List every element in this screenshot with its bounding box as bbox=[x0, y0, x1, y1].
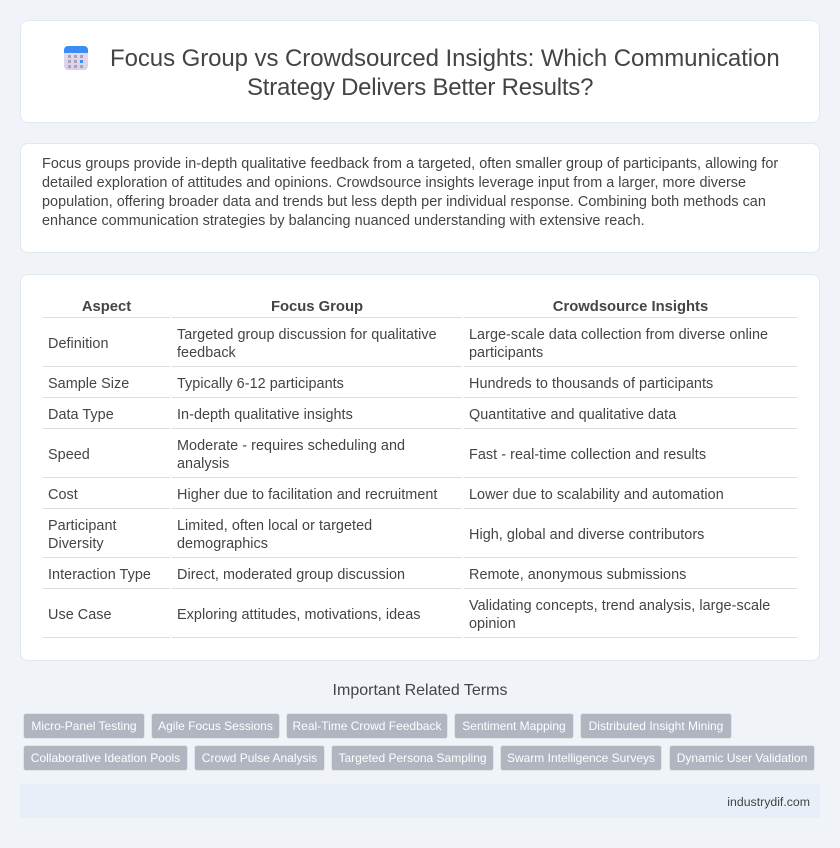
comparison table: Definition bbox=[48, 336, 108, 352]
comparison table: Participant bbox=[48, 518, 117, 534]
intro paragraph: population, offering broader data and trends but less depth per individual response. Combining both methods can bbox=[42, 194, 766, 210]
comparison table: Lower due to scalability and automation bbox=[469, 487, 724, 503]
intro paragraph bbox=[42, 156, 778, 229]
comparison table: Sample Size bbox=[48, 376, 129, 392]
related term tags: Real-Time Crowd Feedback bbox=[293, 719, 441, 733]
header panel bbox=[20, 20, 820, 123]
related term tags: Dynamic User Validation bbox=[677, 751, 807, 765]
related term tags: Collaborative Ideation Pools bbox=[31, 751, 180, 765]
icon: calendar bbox=[64, 46, 88, 70]
comparison table: Moderate - requires scheduling and bbox=[177, 438, 405, 454]
comparison table: Exploring attitudes, motivations, ideas bbox=[177, 607, 421, 623]
comparison table: High, global and diverse contributors bbox=[469, 527, 704, 543]
related term tags: Sentiment Mapping bbox=[462, 719, 566, 733]
comparison table: Direct, moderated group discussion bbox=[177, 567, 405, 583]
comparison table: Limited, often local or targeted bbox=[177, 518, 372, 534]
related term tags: Crowd Pulse Analysis bbox=[202, 751, 317, 765]
footer bar bbox=[20, 784, 820, 818]
panel: intro text bbox=[20, 143, 820, 253]
title bbox=[110, 45, 780, 101]
comparison table: analysis bbox=[177, 456, 229, 472]
panel: comparison table bbox=[20, 274, 820, 661]
comparison table: Fast - real-time collection and results bbox=[469, 447, 706, 463]
comparison table: feedback bbox=[177, 345, 236, 361]
comparison table: Diversity bbox=[48, 536, 104, 552]
comparison table bbox=[43, 299, 797, 638]
comparison table: Remote, anonymous submissions bbox=[469, 567, 686, 583]
comparison table: Quantitative and qualitative data bbox=[469, 407, 676, 423]
related term tags bbox=[23, 713, 815, 771]
comparison table: Hundreds to thousands of participants bbox=[469, 376, 713, 392]
comparison table: Crowdsource Insights bbox=[553, 299, 708, 315]
related term tags: Swarm Intelligence Surveys bbox=[507, 751, 655, 765]
related term tags: Targeted Persona Sampling bbox=[338, 751, 487, 765]
comparison table: Validating concepts, trend analysis, large-scale bbox=[469, 598, 770, 614]
comparison table: Data Type bbox=[48, 407, 114, 423]
comparison table: Targeted group discussion for qualitative bbox=[177, 327, 437, 343]
related term tags: Distributed Insight Mining bbox=[589, 719, 723, 733]
related term tags: Micro-Panel Testing bbox=[31, 719, 137, 733]
comparison table: Use Case bbox=[48, 607, 112, 623]
comparison table: In-depth qualitative insights bbox=[177, 407, 353, 423]
comparison table: Cost bbox=[48, 487, 78, 503]
comparison table: Typically 6-12 participants bbox=[177, 376, 344, 392]
comparison table: Interaction Type bbox=[48, 567, 151, 583]
related term tags: Agile Focus Sessions bbox=[158, 719, 273, 733]
comparison table: Large-scale data collection from diverse online bbox=[469, 327, 768, 343]
intro paragraph: detailed exploration of attitudes and opinions. Crowdsource insights leverage input from a larger, more diverse bbox=[42, 175, 746, 191]
comparison table: Speed bbox=[48, 447, 90, 463]
comparison table: participants bbox=[469, 345, 543, 361]
title: Focus Group vs Crowdsourced Insights: Which Communication bbox=[110, 45, 780, 72]
intro paragraph: enhance communication strategies by balancing nuanced understanding with extensive reach. bbox=[42, 213, 645, 229]
comparison table: Aspect bbox=[82, 299, 131, 315]
heading: related terms: Important Related Terms bbox=[333, 682, 507, 699]
comparison table: opinion bbox=[469, 616, 516, 632]
title: Strategy Delivers Better Results? bbox=[247, 74, 593, 101]
comparison table: demographics bbox=[177, 536, 268, 552]
comparison table: Focus Group bbox=[271, 299, 363, 315]
footer bar: industrydif.com bbox=[727, 795, 810, 809]
intro paragraph: Focus groups provide in-depth qualitative feedback from a targeted, often smaller group of participants, allowing for bbox=[42, 156, 778, 172]
comparison table: Higher due to facilitation and recruitment bbox=[177, 487, 437, 503]
